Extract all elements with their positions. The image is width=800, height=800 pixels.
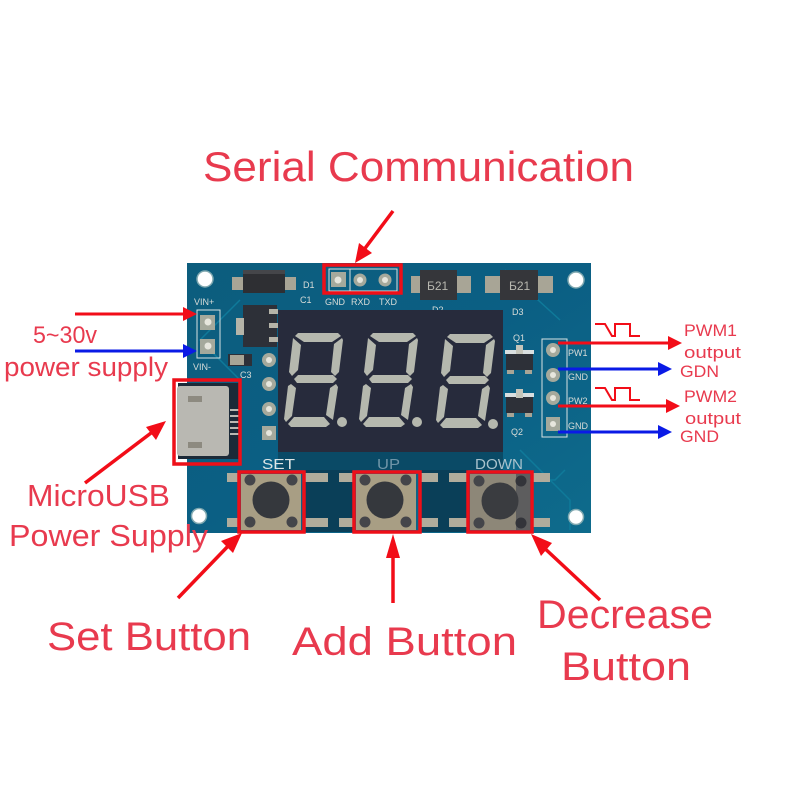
capacitor C1 label: C1 [300,295,312,305]
header: GND RXD TXD pads: RXD [351,297,371,307]
transistor Q1 [505,333,534,374]
arrow: set button [178,533,242,598]
label: GND: GND [680,427,719,446]
header: GND RXD TXD pads [325,269,398,307]
arrow: MicroUSB [85,421,166,483]
transistor Q2: Q2 [511,427,523,437]
label: Button: Button [561,645,691,689]
arrow: decrease button [531,534,600,600]
diode D2: D2 [432,305,444,315]
label: Power Supply: Power Supply [9,518,209,553]
diode D3: Б21 [509,279,531,293]
seven-segment display [278,310,503,452]
diode D1 [232,270,315,293]
digit 3 [436,334,495,428]
power terminal VIN [193,297,220,372]
four pads [262,353,276,440]
title: serial communication: Serial Communication [203,143,634,190]
label: power supply: power supply [4,352,169,382]
regulator chip [236,305,278,347]
circuit board [177,263,591,533]
PWM output header: PW1 [568,348,588,358]
capacitor C3: C3 [240,370,252,380]
UP button: UP [377,456,400,473]
SET button: SET [262,456,295,473]
diode D3: D3 [512,307,524,317]
label: Add Button: Add Button [292,620,517,664]
diode D1: D1 [303,280,315,290]
power terminal VIN: VIN+ [194,297,214,307]
diode D2 [411,270,471,315]
label: Decrease: Decrease [537,593,713,637]
arrow: add button [386,534,400,603]
arrow: VIN+ [75,307,197,321]
DOWN button [449,456,550,530]
arrow: PWM2 ground [558,425,672,439]
digit 2 [359,333,422,427]
transistor Q2 [505,389,534,437]
red highlight boxes [174,265,532,532]
label: PWM2: PWM2 [684,387,737,406]
label: Set Button: Set Button [47,615,251,659]
arrow: VIN- [75,344,197,358]
diode D3 [485,270,553,317]
header: GND RXD TXD pads: TXD [379,297,398,307]
SET button [227,456,328,530]
arrow: PWM1 output [558,324,682,350]
transistor Q1: Q1 [513,333,525,343]
diode D2: Б21 [427,279,449,293]
label: PWM1 output: output [684,343,741,362]
UP button [339,456,438,530]
label: PWM2 output: output [685,409,741,428]
label: MicroUSB: MicroUSB [27,478,170,513]
PWM output header: GND [568,421,588,431]
arrow: PWM2 output [558,388,680,413]
arrow: PWM1 ground [558,362,672,376]
PWM output header: GND [568,372,588,382]
digit 1 [284,333,347,427]
label: voltage: 5~30v [33,322,97,349]
PWM output header [542,339,588,437]
microUSB connector [177,383,240,459]
arrow: serial communication [355,211,393,263]
DOWN button: DOWN [475,456,523,473]
mounting holes [192,271,584,524]
label: GDN: GDN [680,362,719,381]
label: PWM1: PWM1 [684,321,737,340]
header: GND RXD TXD pads: GND [325,297,346,307]
capacitor C3 [228,354,252,380]
PWM output header: PW2 [568,396,588,406]
power terminal VIN: VIN- [193,362,211,372]
